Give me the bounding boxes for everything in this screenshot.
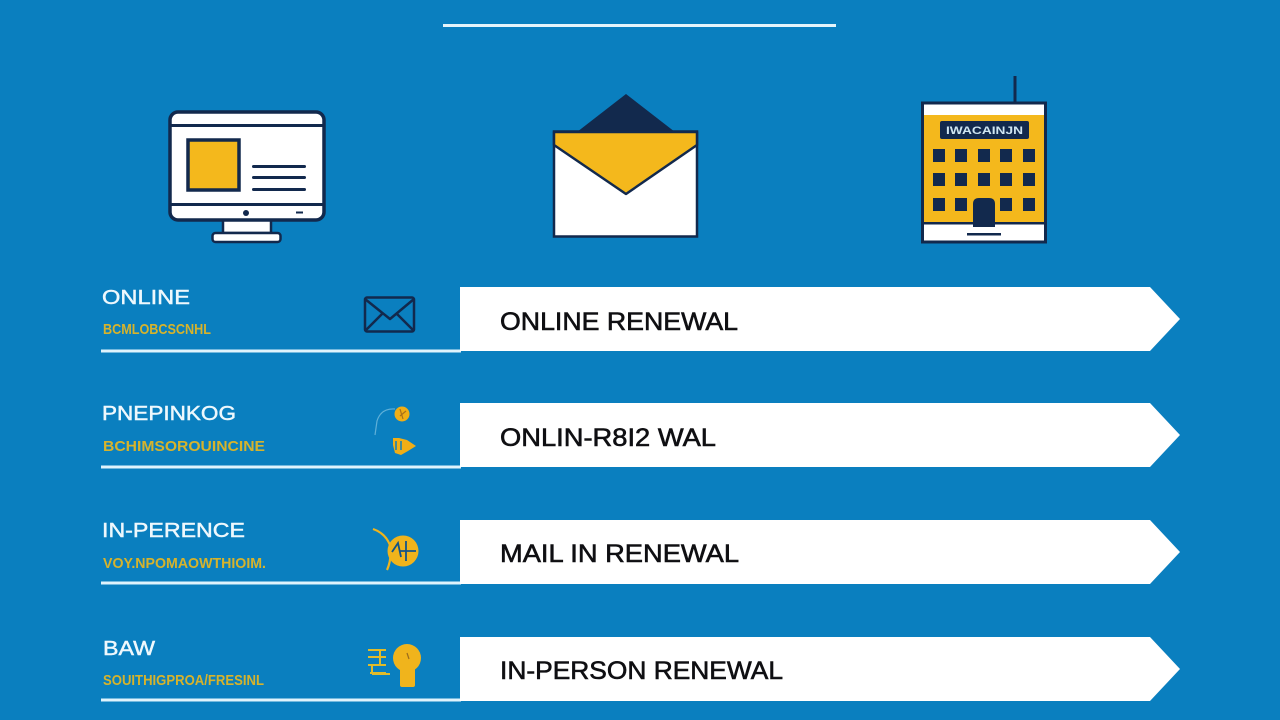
building windows xyxy=(933,149,1035,211)
row 4 arrow banner xyxy=(460,637,1180,701)
row 3 banner text: MAIL IN RENEWAL xyxy=(500,540,739,568)
row 4 icon: lightbulb xyxy=(368,644,421,687)
row 2 icon: small glyphs xyxy=(375,406,416,455)
row 1 sublabel: BCMLOBCSCNHL xyxy=(103,321,211,338)
row 3 icon: round badge xyxy=(373,529,418,570)
row 3 sublabel: VOY.NPOMAOWTHIOIM. xyxy=(103,555,266,572)
row 3 label: IN-PERENCE xyxy=(102,520,245,542)
icon: envelope xyxy=(554,94,697,236)
building sign text: IWACAINJN xyxy=(946,125,1023,137)
row 4: bank xyxy=(101,637,1180,702)
row 1 banner text: ONLINE RENEWAL xyxy=(500,308,738,336)
row 2 sublabel: BCHIMSOROUINCINE xyxy=(103,438,265,455)
icon: government building xyxy=(922,76,1046,242)
row 3: in person xyxy=(101,520,1180,584)
row 1: online xyxy=(101,287,1180,352)
row 4 sublabel: SOUITHIGPROA/FRESINL xyxy=(103,672,264,689)
row 1 arrow banner xyxy=(460,287,1180,351)
icon: computer monitor xyxy=(170,112,324,242)
row 4 label: BAW xyxy=(103,638,155,660)
row 1 label: ONLINE xyxy=(102,287,190,309)
row 2 banner text: ONLIN-R8I2 WAL xyxy=(500,424,716,452)
row 2: phone xyxy=(101,403,1180,468)
row 2 arrow banner xyxy=(460,403,1180,467)
row 3 arrow banner xyxy=(460,520,1180,584)
row 2 label: PNEPINKOG xyxy=(102,403,236,425)
row 1 icon: mail outline xyxy=(365,298,414,332)
building door xyxy=(973,198,995,227)
row 4 banner text: IN-PERSON RENEWAL xyxy=(500,657,783,685)
